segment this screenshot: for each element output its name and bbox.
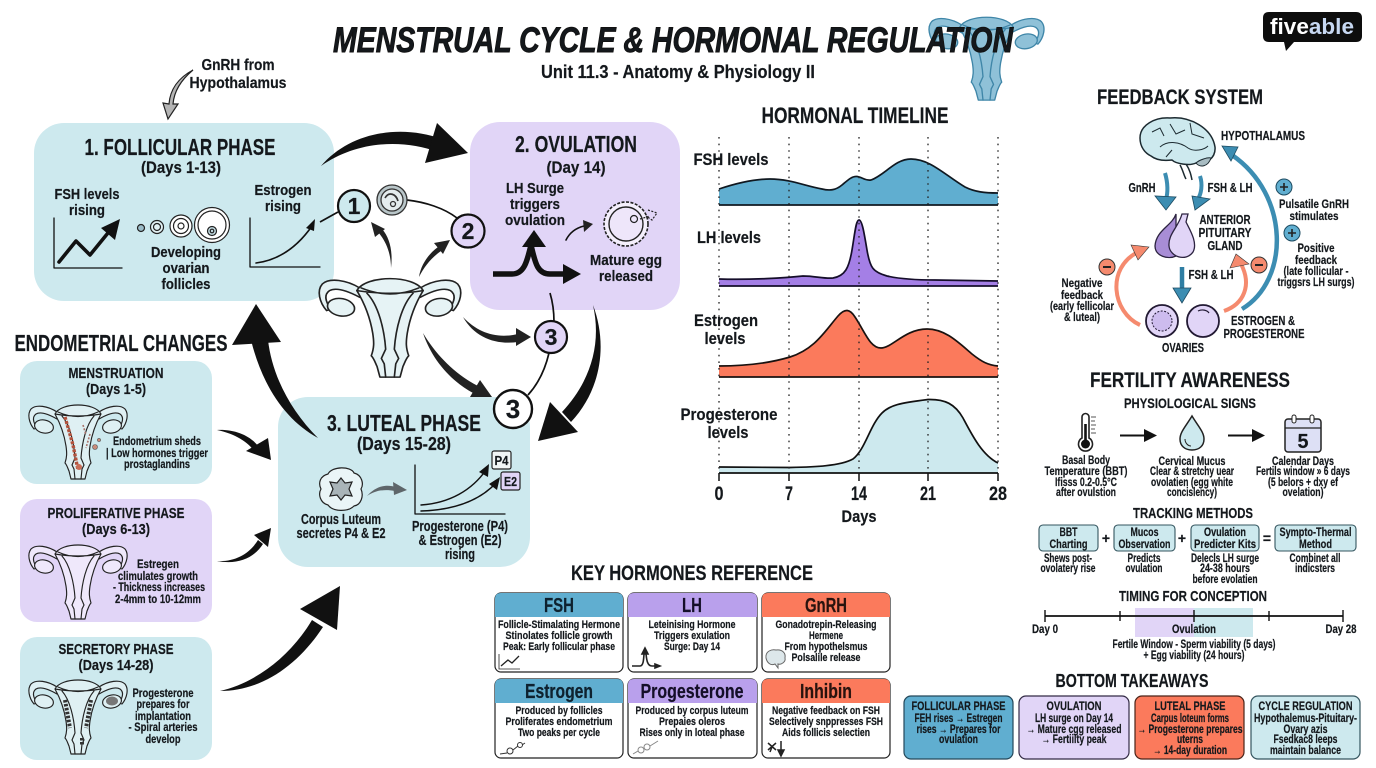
text: developing ovarian follicles: ovarian xyxy=(162,260,210,277)
icon: brain small xyxy=(766,650,785,668)
chart: P4 and E2 rising: E2 xyxy=(504,475,517,489)
takeaway: luteal: uterns xyxy=(1177,734,1203,746)
axis labels: 7 xyxy=(785,484,793,505)
icon: calendar xyxy=(1285,415,1321,453)
arrow: positive feedback xyxy=(1222,146,1277,309)
operators xyxy=(1102,530,1271,546)
subtitle: Unit 11.3 - Anatomy & Physiology II xyxy=(541,62,815,82)
icon: decorative uterus behind title xyxy=(929,17,1044,100)
text: calendar days: Calendar Days xyxy=(1272,454,1334,468)
step marker 3 small: 3 xyxy=(545,324,557,350)
timeline: fertile window: Day 0 xyxy=(1032,622,1058,636)
icon: developing follicles xyxy=(138,208,230,242)
takeaway: follicular: ovulation xyxy=(939,734,978,746)
text: method descriptions: ovulation xyxy=(1126,563,1162,575)
icon: calendar: 5 xyxy=(1298,431,1308,453)
arrow: uterus to marker 2 xyxy=(419,240,450,277)
icon: plus upper xyxy=(1276,179,1292,195)
card: Progesterone: Progesterone xyxy=(640,681,744,703)
card: Inhibin: Negative feedback on FSH xyxy=(772,705,880,717)
text: progesterone and estrogen rising: & Estrogen (E2) xyxy=(418,533,502,549)
text: LH surge triggers ovulation: triggers xyxy=(510,196,560,213)
card: Estrogen: Produced by follicles xyxy=(516,705,602,717)
text: mature egg released: Mature egg xyxy=(590,252,662,269)
text: FSH levels rising: rising xyxy=(69,202,105,219)
text: progesterone prepares: develop xyxy=(146,734,180,746)
text: negative feedback xyxy=(1050,276,1114,324)
text: LH surge triggers ovulation: LH Surge xyxy=(506,180,564,197)
card: Progesterone: Prepaies oleros xyxy=(659,716,725,728)
arrow: GnRH xyxy=(1155,173,1176,210)
text: estrogen rising: rising xyxy=(265,198,301,215)
text: progesterone prepares: implantation xyxy=(135,711,191,723)
text: FSH levels rising: FSH levels xyxy=(54,186,120,203)
arrow: corpus luteum to chart xyxy=(367,482,407,496)
axis labels: 0 xyxy=(714,484,724,505)
series labels: LH levels xyxy=(697,228,761,247)
takeaway: cycle regulation xyxy=(1251,696,1360,759)
text: basal body temperature: Temperature (BBT) xyxy=(1044,464,1128,478)
text: mature egg released xyxy=(590,252,662,285)
icon: mature egg xyxy=(604,202,657,246)
card: FSH: Peak: Early follicular phase xyxy=(503,641,615,653)
text: progesterone prepares: Progesterone xyxy=(132,688,194,700)
text: estrogen stimulates growth: climulates growth xyxy=(118,571,198,583)
card: Inhibin: Selectively snppresses FSH xyxy=(769,716,883,728)
title: MENSTRUAL CYCLE & HORMONAL REGULATION xyxy=(333,21,1014,60)
takeaway: luteal xyxy=(1135,696,1244,759)
takeaway: luteal: LUTEAL PHASE xyxy=(1154,699,1226,713)
icon: uterus secretory xyxy=(29,680,127,754)
card: GnRH: From hypothelsmus xyxy=(784,641,868,653)
panel: menstruation: MENSTRUATION xyxy=(68,366,164,382)
text: progesterone and estrogen rising: rising xyxy=(445,547,475,563)
arrow: FSH and LH to ovaries xyxy=(1173,267,1191,303)
label: anterior pituitary gland: PITUITARY xyxy=(1198,226,1252,240)
label: GnRH: GnRH xyxy=(1128,181,1156,195)
card: Estrogen xyxy=(495,679,623,758)
text: cervical mucus: Clear & stretchy uear xyxy=(1150,466,1234,478)
card: LH xyxy=(628,593,757,672)
card: LH: Surge: Day 14 xyxy=(664,641,721,653)
text: estrogen stimulates growth: 2-4mm to 10-12mm xyxy=(115,594,201,606)
text: cervical mucus xyxy=(1150,454,1234,499)
icon: molecule faded xyxy=(633,741,658,754)
text: endometrium sheds: | Low hormones trigger xyxy=(106,448,208,460)
subheading: physiological signs: PHYSIOLOGICAL SIGNS xyxy=(1124,395,1256,411)
text: positive feedback: Positive xyxy=(1298,241,1335,255)
icon: minus left xyxy=(1099,259,1115,275)
text: method descriptions xyxy=(1040,553,1340,586)
text: corpus luteum secretes: secretes P4 & E2 xyxy=(296,526,386,542)
text: negative feedback: feedback xyxy=(1061,288,1103,302)
text: pulsatile GnRH xyxy=(1279,197,1349,223)
text: developing ovarian follicles: follicles xyxy=(162,276,210,293)
series labels: Estrogen xyxy=(694,311,758,330)
icon: LH surge arrow xyxy=(493,230,581,284)
operators: + xyxy=(1178,530,1186,546)
chart: hormonal timeline xyxy=(680,137,1007,526)
operators: + xyxy=(1102,530,1110,546)
text: endometrium sheds: Endometrium sheds xyxy=(113,436,201,448)
method: sympto-thermal: Method xyxy=(1299,537,1332,551)
chart: P4 and E2 rising: P4 xyxy=(494,454,509,468)
panel: luteal phase xyxy=(278,397,530,567)
axis labels: 28 xyxy=(989,484,1007,505)
text: method descriptions: indicsters xyxy=(1295,563,1335,575)
card: Progesterone: Rises only in loteal phase xyxy=(640,727,744,739)
arrow: secretory to luteal xyxy=(220,586,340,691)
method: ovulation predictor kits: Ovulation xyxy=(1204,525,1246,539)
panel: proliferative phase: PROLIFERATIVE PHASE xyxy=(48,506,185,522)
takeaway: luteal: Carpus loteum forms xyxy=(1151,713,1229,725)
card: Inhibin xyxy=(762,679,890,758)
series: Estrogen xyxy=(719,310,998,377)
text: estrogen stimulates growth xyxy=(113,559,205,606)
card: GnRH: GnRH xyxy=(805,595,847,617)
text: basal body temperature: after ovulstion xyxy=(1056,487,1116,499)
text: estrogen stimulates growth: - Thickness increases xyxy=(113,582,205,594)
timeline: fertile window: Fertile Window - Sperm viability (5 days) xyxy=(1112,639,1276,651)
method: mucus observation: Observation xyxy=(1118,537,1170,551)
heading: feedback system: FEEDBACK SYSTEM xyxy=(1097,85,1263,109)
method: ovulation predictor kits xyxy=(1191,525,1259,551)
step marker 3 small xyxy=(535,321,567,353)
method: BBT charting: BBT xyxy=(1060,525,1078,539)
arrow: menstruation to luteal xyxy=(217,430,271,460)
takeaway: follicular xyxy=(904,696,1013,759)
heading: endometrial changes: ENDOMETRIAL CHANGES xyxy=(14,330,228,356)
takeaway: ovulation: → Fertiilty peak xyxy=(1042,734,1107,746)
method: BBT charting xyxy=(1039,525,1098,551)
card: FSH: FSH xyxy=(544,595,574,617)
card: FSH xyxy=(495,593,623,672)
step marker 3 large xyxy=(494,390,532,428)
card: GnRH: Polsalile release xyxy=(792,652,860,664)
takeaway: luteal: → 14-day duration xyxy=(1153,745,1227,757)
label: anterior pituitary gland xyxy=(1198,213,1252,253)
text: basal body temperature xyxy=(1044,453,1128,499)
icon: egg between markers xyxy=(377,185,407,215)
text: negative feedback: & luteal) xyxy=(1064,310,1100,324)
series labels: levels xyxy=(708,423,748,442)
panel: menstruation: (Days 1-5) xyxy=(86,382,146,398)
method: ovulation predictor kits: Predicter Kits xyxy=(1194,537,1256,551)
step marker 2: 2 xyxy=(462,218,474,244)
step marker 3 large: 3 xyxy=(506,394,520,424)
card: Inhibin: Inhibin xyxy=(800,681,852,703)
axis labels: 14 xyxy=(851,484,867,505)
series labels: FSH levels xyxy=(694,150,768,169)
text: positive feedback: (late follicular - xyxy=(1284,264,1348,278)
series labels xyxy=(680,150,778,442)
diagram: central uterus xyxy=(319,279,461,377)
takeaway: follicular: FOLLICULAR PHASE xyxy=(912,699,1006,713)
label: FSH and LH upper: FSH & LH xyxy=(1208,181,1252,195)
card: FSH: Stinolates follicle growth xyxy=(506,630,613,642)
icon: corpus luteum xyxy=(320,468,362,510)
operators: = xyxy=(1263,530,1271,546)
text: estrogen rising xyxy=(254,182,312,215)
text: cervical mucus: Cervical Mucus xyxy=(1158,454,1226,468)
subheading: timing for conception: TIMING FOR CONCEPTION xyxy=(1119,588,1267,605)
panel: luteal phase: (Days 15-28) xyxy=(357,434,451,454)
text: estrogen stimulates growth: Estregen xyxy=(137,559,179,571)
text: method descriptions: before evolatien xyxy=(1192,574,1258,586)
text: progesterone and estrogen rising xyxy=(412,519,508,563)
annotation: GnRH from Hypothalamus xyxy=(163,57,287,119)
text: method descriptions: 24-38 hours xyxy=(1200,563,1250,575)
panel: follicular phase: (Days 1-13) xyxy=(141,158,221,177)
chart: P4 and E2 rising xyxy=(415,451,520,514)
card: GnRH xyxy=(762,593,890,672)
card: Inhibin: Aids follicis selectien xyxy=(782,727,870,739)
takeaway: ovulation xyxy=(1019,696,1129,759)
logo: fiveable: fiveable xyxy=(1270,14,1354,39)
arrow: uterus to marker 1 xyxy=(371,222,392,268)
text: basal body temperature: Basal Body xyxy=(1062,453,1110,467)
arrow: proliferative to luteal xyxy=(217,528,271,562)
panel: proliferative phase xyxy=(20,499,212,622)
connector lines xyxy=(320,200,554,395)
panel: luteal phase: 3. LUTEAL PHASE xyxy=(327,410,481,436)
panel: follicular phase: 1. FOLLICULAR PHASE xyxy=(84,134,276,160)
chart: FSH rising xyxy=(54,218,122,268)
timeline: fertile window: + Egg viability (24 hours) xyxy=(1144,650,1245,662)
series: Progesterone xyxy=(719,399,998,473)
icon: LH surge xyxy=(632,648,660,668)
method: sympto-thermal xyxy=(1275,525,1356,551)
text: method descriptions: Predicts xyxy=(1128,553,1160,565)
heading: fertility awareness: FERTILITY AWARENESS xyxy=(1090,368,1290,392)
takeaway: cycle regulation: Ovary azis xyxy=(1284,724,1328,736)
subheading: tracking methods: TRACKING METHODS xyxy=(1133,505,1253,522)
text: pulsatile GnRH: Pulsatile GnRH xyxy=(1279,197,1349,211)
arrow: follicular to ovulation xyxy=(321,123,468,166)
arrow: FSH and LH from hypothalamus xyxy=(1192,176,1210,210)
text: calendar days: ovelation) xyxy=(1282,487,1324,499)
card: LH: Triggers exulation xyxy=(654,630,730,642)
heading: bottom takeaways: BOTTOM TAKEAWAYS xyxy=(1056,671,1208,691)
axis labels: 21 xyxy=(920,484,936,505)
logo: fiveable xyxy=(1263,12,1362,51)
text: calendar days xyxy=(1256,454,1350,499)
label: ovaries: OVARIES xyxy=(1162,341,1204,355)
takeaway: ovulation: LH surge on Day 14 xyxy=(1035,713,1113,725)
text: mature egg released: released xyxy=(599,268,653,285)
panel: proliferative phase: (Days 6-13) xyxy=(82,522,150,538)
panel: secretory phase xyxy=(20,637,212,760)
text: FSH levels rising xyxy=(54,186,120,219)
card: Estrogen: Estrogen xyxy=(525,681,593,703)
text: negative feedback: Negative xyxy=(1062,276,1103,290)
card: LH: Leteinising Hormone xyxy=(648,619,736,631)
text: estrogen rising: Estrogen xyxy=(254,182,312,199)
panel: ovulation: (Day 14) xyxy=(546,158,606,177)
card: Progesterone xyxy=(628,679,757,758)
icon: molecule xyxy=(500,742,525,754)
text: developing ovarian follicles xyxy=(151,244,221,293)
text: corpus luteum secretes xyxy=(296,512,386,542)
takeaway: follicular: FEH rises → Estregen xyxy=(914,713,1002,725)
text: endometrium sheds xyxy=(106,436,208,471)
panel: ovulation: 2. OVULATION xyxy=(515,131,637,157)
chart: estrogen rising xyxy=(250,218,320,267)
takeaway: luteal: → Progesterone prepares xyxy=(1138,724,1242,736)
card: LH: LH xyxy=(682,595,702,617)
takeaway: ovulation: OVULATION xyxy=(1046,699,1102,713)
heading: hormonal timeline: HORMONAL TIMELINE xyxy=(762,103,948,128)
icon: thermometer xyxy=(1079,414,1096,451)
diagram: feedback system xyxy=(1050,118,1355,355)
timeline: fertile window: Ovulation xyxy=(1172,622,1216,636)
label: estrogen and progesterone: PROGESTERONE xyxy=(1224,327,1304,341)
icon: water drop xyxy=(1180,416,1204,450)
method: sympto-thermal: Sympto-Thermal xyxy=(1280,525,1352,539)
card: GnRH: Gonadotrepin-Releasing xyxy=(776,619,876,631)
arrow: uterus to luteal marker xyxy=(423,333,492,397)
card: GnRH: Hermene xyxy=(809,630,843,642)
text: progesterone prepares: prepares for xyxy=(136,699,190,711)
step marker 2 xyxy=(452,214,484,248)
card: Estrogen: Two peaks per cycle xyxy=(518,727,600,739)
annotation: GnRH from Hypothalamus: GnRH from xyxy=(202,57,274,74)
label: estrogen and progesterone: ESTROGEN & xyxy=(1231,314,1295,328)
text: pulsatile GnRH: stimulates xyxy=(1290,209,1339,223)
text: basal body temperature: Ifisss 0.2-0.5°C xyxy=(1055,477,1117,489)
step marker 1 xyxy=(338,190,370,222)
text: positive feedback: feedback xyxy=(1295,253,1337,267)
panel: ovulation xyxy=(470,122,680,310)
icon: plus lower xyxy=(1284,225,1300,241)
icon: uterus shedding xyxy=(29,405,127,479)
takeaway: follicular: rises → Prepares for xyxy=(916,724,1001,736)
text: endometrium sheds: prostaglandins xyxy=(124,459,190,471)
method: mucus observation: Mucos xyxy=(1130,525,1159,539)
icon: suppress arrow xyxy=(768,741,784,756)
timeline: fertile window: Day 28 xyxy=(1326,622,1357,636)
label: FSH and LH lower: FSH & LH xyxy=(1188,268,1234,282)
arrow: negative feedback right xyxy=(1224,254,1249,311)
card: Estrogen: Proliferates endometrium xyxy=(506,716,613,728)
label: estrogen and progesterone xyxy=(1224,314,1304,341)
arrow: luteal to follicular xyxy=(232,304,318,438)
panel: follicular phase xyxy=(34,123,334,301)
icon: rising line xyxy=(499,654,520,669)
heading: key hormones reference: KEY HORMONES REFERENCE xyxy=(571,562,813,585)
icon: brain xyxy=(1140,118,1215,180)
series labels: Progesterone xyxy=(680,405,778,424)
text: progesterone prepares: - Spiral arteries xyxy=(128,722,198,734)
series labels: levels xyxy=(704,329,746,348)
text: positive feedback xyxy=(1278,241,1355,289)
text: method descriptions: ovolatery rise xyxy=(1040,563,1096,575)
annotation: GnRH from Hypothalamus: Hypothalamus xyxy=(190,75,287,92)
text: progesterone and estrogen rising: Progesterone (P4) xyxy=(412,519,508,535)
text: method descriptions: Delecls LH surge xyxy=(1191,553,1259,565)
panel: menstruation xyxy=(20,361,212,484)
label: hypothalamus: HYPOTHALAMUS xyxy=(1221,129,1305,143)
icon: uterus proliferative xyxy=(29,545,127,619)
panel: secretory phase: (Days 14-28) xyxy=(78,658,154,674)
text: cervical mucus: concislency) xyxy=(1167,487,1217,499)
icon: ovaries xyxy=(1146,305,1219,337)
text: LH surge triggers ovulation: ovulation xyxy=(505,212,565,229)
label: anterior pituitary gland: GLAND xyxy=(1208,239,1242,253)
timeline: fertile window xyxy=(1032,608,1357,662)
takeaway: ovulation: → Mature cgg released xyxy=(1026,724,1122,736)
arrow: uterus to marker 3 xyxy=(463,317,531,346)
text: negative feedback: (early fellicolar xyxy=(1050,299,1114,313)
text: calendar days: (5 belors + dxy ef xyxy=(1268,477,1338,489)
takeaway: cycle regulation: maintain balance xyxy=(1270,745,1341,757)
step marker 1: 1 xyxy=(348,193,361,219)
text: developing ovarian follicles: Developing xyxy=(151,244,221,261)
series: LH xyxy=(719,220,998,286)
arrow: to mature egg xyxy=(566,220,593,240)
text: LH surge triggers ovulation xyxy=(505,180,565,229)
card: Progesterone: Produced by corpus luteum xyxy=(636,705,749,717)
panel: secretory phase: SECRETORY PHASE xyxy=(58,642,174,658)
method: BBT charting: Charting xyxy=(1050,537,1088,551)
arrow: BBT to mucus xyxy=(1120,429,1157,442)
icon: minus right xyxy=(1251,257,1267,273)
label: anterior pituitary gland: ANTERIOR xyxy=(1200,213,1250,227)
method: mucus observation xyxy=(1114,525,1175,551)
icon: pituitary gland xyxy=(1155,214,1195,258)
text: cervical mucus: ovolatien (egg white xyxy=(1151,477,1233,489)
axis labels: Days xyxy=(842,507,876,526)
text: method descriptions: Shews post- xyxy=(1044,553,1092,565)
arrow: ovulation to luteal xyxy=(538,305,601,441)
axis labels xyxy=(714,484,1007,526)
text: method descriptions: Combinet all xyxy=(1290,553,1340,565)
card: FSH: Follicle-Stimalating Hermone xyxy=(498,619,620,631)
arrow: mucus to calendar xyxy=(1228,429,1265,442)
text: corpus luteum secretes: Corpus Luteum xyxy=(301,512,381,528)
text: progesterone prepares xyxy=(128,688,198,746)
arrow: negative feedback left xyxy=(1116,245,1149,325)
series: FSH xyxy=(719,159,998,205)
takeaway: cycle regulation: Fsedkac8 leeps xyxy=(1274,734,1338,746)
